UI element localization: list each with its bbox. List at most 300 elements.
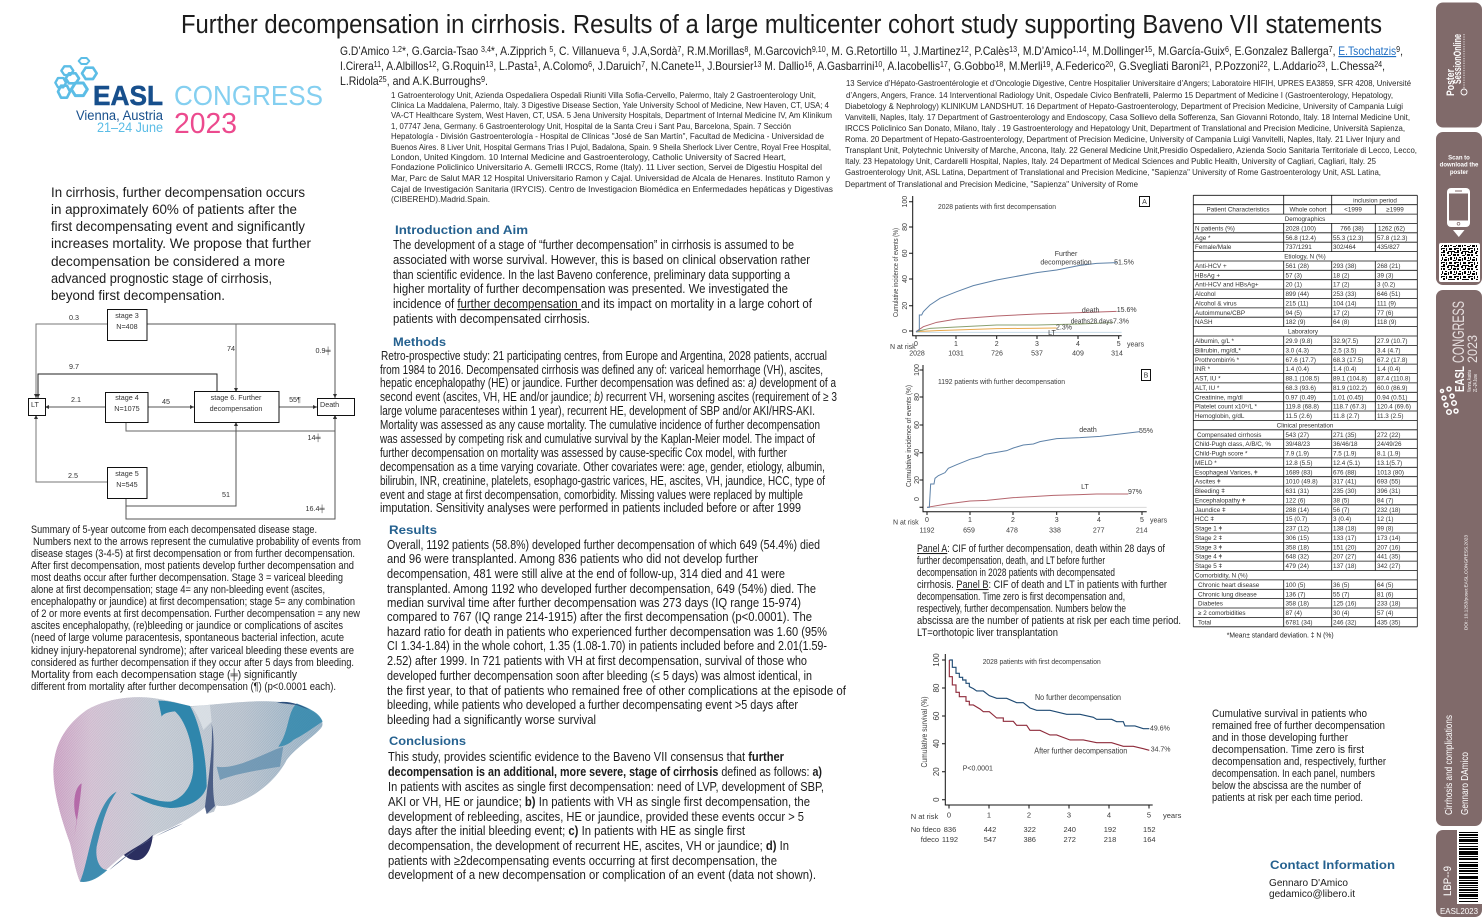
table: patient characteristics: 3.4 (4.7): [1377, 347, 1400, 354]
text: conclusions: development of rebleeding, ascites, HE or jaundice, provided these events occur > 5: [388, 809, 804, 824]
diagram labels: stage 5: [115, 469, 139, 478]
key message text: [51, 185, 311, 304]
table: patient characteristics: HBsAg +: [1195, 272, 1220, 279]
text: results: decompensation, 481 were still alive at the end of follow-up, 314 died and 41 were: [387, 566, 785, 581]
chart B labels: years: [1150, 518, 1168, 524]
chart B labels: 80: [914, 393, 921, 401]
chart A labels: N at risk: [890, 344, 916, 351]
diagram summary text: Mortality from each decompensation stage (╪) significantly: [31, 668, 298, 682]
table: patient characteristics: 55 (7): [1333, 591, 1349, 598]
chart A labels: years: [1127, 342, 1145, 348]
logo: EASL Congress 2023: 21–24 June: [97, 120, 163, 135]
table: patient characteristics: Diabetes: [1198, 601, 1223, 608]
table: patient characteristics: Whole cohort: [1289, 207, 1327, 214]
table: patient characteristics: 11.5 (2.6): [1286, 413, 1312, 420]
chart C labels: 192: [1104, 825, 1116, 834]
table: patient characteristics: ALT, IU *: [1195, 385, 1220, 392]
chart B labels: [893, 364, 1168, 534]
table: patient characteristics: 29.9 (9.8): [1286, 338, 1312, 345]
table: patient characteristics: 118.7 (67.3): [1333, 404, 1366, 411]
diagram summary text: ascites encephalopathy, (re)bleeding or jaundice or complications of ascites: [31, 620, 343, 632]
table: patient characteristics: 67.2 (17.8): [1377, 357, 1407, 364]
sidebar: poster session online: Poster: [1445, 68, 1457, 96]
chart C labels: [911, 653, 1182, 844]
chart A labels: 15.6%: [1117, 307, 1137, 314]
text: introduction: The development of a stage of “further decompensation” in cirrhosis is assumed to be: [393, 237, 794, 252]
logo: EASL Congress 2023: 2023: [174, 108, 237, 140]
diagram summary text: [31, 524, 361, 693]
table: patient characteristics: 120.4 (69.6): [1377, 404, 1411, 411]
table: patient characteristics: Chronic lung disease: [1198, 591, 1257, 598]
affiliations left: [391, 90, 833, 204]
table: patient characteristics: Female/Male: [1195, 244, 1232, 251]
text: results: the first year, to that of patients who remained free of other complications at the episode of: [387, 683, 846, 698]
caption: survival chart: remained free of further decompensation: [1212, 720, 1385, 732]
chart A labels: 3: [1035, 341, 1039, 348]
diagram labels: N=1075: [114, 404, 140, 413]
text: methods: decompensation as a time varying covariate. Other covariates were: age, gender, etiology, albumin,: [380, 459, 825, 474]
logo: EASL Congress 2023: Vienna, Austria: [76, 108, 163, 123]
sidebar: congress and session info: Vienna, Austria: [1467, 370, 1473, 392]
text: conclusions: decompensation is an additional, more severe, stage of cirrhosis defined as follows: a): [388, 764, 822, 779]
table: patient characteristics: 57.8 (12.3): [1377, 235, 1407, 242]
affiliations right: d’Angers, Angers, France. 14 Interventional Radiology Unit, Ospedale Civico Benfratelli, Palermo 15 Department of Medicine I (Gastroenterology, Hepatology,: [846, 90, 1393, 100]
diagram labels: 0.9╪: [315, 346, 331, 356]
sidebar: scan to download: download the: [1440, 162, 1479, 168]
diagram labels: 14╪: [307, 433, 321, 443]
table: patient characteristics: 12 (1): [1377, 516, 1393, 523]
caption: panels A and B: respectively, further decompensation. Numbers below the: [917, 603, 1126, 615]
chart A labels: LT: [1048, 330, 1057, 337]
table: patient characteristics: 67.6 (17.7): [1286, 357, 1316, 364]
table: patient characteristics: 56 (7): [1333, 507, 1349, 514]
affiliations left: (CIBEREHD).Madrid.Spain.: [391, 194, 490, 204]
table: patient characteristics: 1010 (49.8): [1286, 479, 1318, 486]
table: patient characteristics: 111 (9): [1377, 300, 1396, 308]
table: patient characteristics: 358 (18): [1286, 601, 1309, 608]
table: patient characteristics: INR *: [1195, 366, 1211, 373]
chart C labels: 3: [1067, 810, 1071, 820]
table: patient characteristics: 1.4 (0.4): [1377, 366, 1400, 373]
table: patient characteristics: <1999: [1344, 207, 1362, 214]
caption: panels A and B: abscissa are the number of patients at risk per each time period.: [917, 615, 1181, 627]
table: patient characteristics: 77 (6): [1377, 310, 1393, 317]
diagram labels: 74: [227, 344, 235, 353]
chart B labels: 2: [1011, 517, 1015, 524]
table footnote: *Mean± standard deviation. ‡ N (%): [1227, 632, 1334, 640]
chart B labels: 1: [968, 517, 972, 524]
chart B labels: Cumulative incidence of events (%): [906, 385, 913, 487]
logo: EASL Congress 2023: EASL: [93, 80, 163, 111]
text: methods: was assessed by competing risk and cumulative survival by the Kaplan-Meier model. The impact of: [379, 431, 815, 446]
affiliations left: 1 Gatroenterology Unit, Azienda Ospedaliera Ospedali Riuniti Villa Sofia-Cervello, Palermo, Italy 2 Gastroenterology Unit,: [391, 90, 816, 100]
contact information: [1269, 860, 1395, 900]
chart B labels: 1192 patients with further decompensation: [938, 379, 1065, 386]
table: patient characteristics: 27.9 (10.7): [1377, 338, 1407, 345]
table: patient characteristics: Bleeding ǂ: [1195, 488, 1225, 495]
diagram labels: stage 4: [115, 393, 139, 402]
table: patient characteristics: 94 (5): [1286, 310, 1302, 317]
chart B labels: 55%: [1139, 428, 1153, 435]
table: patient characteristics: 36 (5): [1333, 582, 1349, 589]
chart A labels: 80: [902, 223, 909, 231]
chart A labels: 40: [902, 275, 909, 283]
table: patient characteristics: 38 (5): [1333, 498, 1349, 504]
table: patient characteristics: 32.9(7.5): [1333, 338, 1358, 345]
table: patient characteristics: 232 (18): [1377, 507, 1400, 514]
affiliations right: [845, 78, 1417, 189]
table: patient characteristics: 233 (18): [1377, 601, 1400, 608]
sidebar: scan to download: [1436, 132, 1482, 285]
table: patient characteristics: 173 (14): [1377, 535, 1400, 542]
affiliations left: 1, 07747 Jena, Germany. 6 Gastroenterology Unit, Hospital de la Santa Creu i Sant Pau, Barcelona, Spain. 7 Sección: [391, 121, 791, 131]
chart A labels: 7.3%: [1113, 318, 1129, 326]
chart C labels: 34.7%: [1151, 746, 1171, 754]
chart A labels: 2.3%: [1056, 324, 1072, 332]
table: patient characteristics: ≥1999: [1386, 207, 1404, 214]
table: patient characteristics: ≥ 2 comorbidities: [1198, 610, 1246, 617]
table: patient characteristics: 272 (22): [1377, 432, 1400, 439]
text: conclusions: This study, provides scientific evidence to the Baveno VII consensus that further: [388, 749, 784, 764]
icon: EASL hexagons: [1440, 387, 1458, 414]
table: patient characteristics: Creatinine, mg/dl: [1195, 394, 1243, 401]
chart C labels: fdeco: [921, 835, 939, 844]
chart B labels: LT: [1081, 484, 1090, 491]
table: patient characteristics: Esophageal Varices, ǂ: [1195, 469, 1258, 476]
table: patient characteristics: 55.3 (12.3): [1333, 235, 1363, 242]
panel tag A: A: [1142, 199, 1147, 206]
chart B labels: 1192: [919, 528, 935, 534]
table: patient characteristics: 1.4 (0.4): [1286, 366, 1309, 373]
affiliations left: Mar, Parc de Salut MAR 12 Hospital Universitario Ramon y Cajal. Universidad de Alcala de Henares. Instituto Ramon y: [391, 173, 831, 183]
text: conclusions: development of a new decompensation or complication of an event (data not shown).: [388, 867, 816, 882]
chart A labels: 4: [1076, 341, 1080, 348]
table: patient characteristics: 125 (16): [1333, 601, 1356, 608]
icon: arrow down: [1453, 230, 1464, 237]
chart B labels: 478: [1006, 528, 1018, 534]
table: patient characteristics: 7.9 (1.9): [1286, 451, 1309, 458]
chart C labels: 1: [987, 810, 991, 820]
chart C labels: After further decompensation: [1034, 746, 1127, 756]
table: patient characteristics: 12.4 (5.1): [1333, 460, 1360, 467]
chart C labels: 0: [947, 810, 951, 820]
affiliations left: VA-CT Healthcare System, West Haven, CT, USA. 5 Jena University Hospitals, Department of Internal Medicine IV, Am Klinikum: [391, 110, 832, 120]
diagram summary text: of 2 or more events at first decompensation. Further decompensation = any new: [31, 608, 360, 620]
diagram labels: decompensation: [210, 404, 262, 413]
authors: I.Cirera11, A.Albillos12, G.Roquin13, L.Pasta1, A.Colomo6, J.Daruich7, N.Canete11, J.Boursier13 M. Dallio16, A.Gasbarrini10, A.Iacobellis17, G.Gobbo18, M.Merli19, A.Federico20, G.Svegliati Baroni21, P.Pozzoni22, L.Addario23, L.Chessa24,: [340, 60, 1385, 73]
table: patient characteristics: 133 (17): [1333, 535, 1356, 542]
text: methods: bilirubin, INR, creatinine, platelets, esophago-gastric varices, HE, ascites, VH, jaundice, HCC, type of: [380, 473, 825, 488]
affiliations left: Fondazione Policlinico Universitario A. Gemelli IRCCS, Rome (Italy). 11 Liver section, Servei de Digestiu Hospital del: [391, 162, 822, 172]
chart C labels: N at risk: [911, 812, 938, 821]
authors: L.Ridola25, and A.K.Burroughs9.: [340, 74, 488, 88]
chart C labels: 60: [932, 711, 941, 720]
table: patient characteristics: inclusion period: [1353, 197, 1397, 204]
diagram summary text: most deaths occur after further decompensation. Stage 3 = variceal bleeding: [31, 572, 343, 584]
caption: panels A and B: [917, 543, 1181, 639]
chart B labels: death: [1079, 427, 1097, 434]
affiliations right: Vanvitelli, Naples, Italy. 17 Department of Gastroenterology and Endoscopy, Casa Sollievo della Sofferenza, San Giovanni Rotondo, Italy. 18 Internal Medicine Unit,: [845, 112, 1410, 122]
chart C labels: years: [1163, 811, 1182, 820]
table: patient characteristics: 342 (27): [1377, 563, 1400, 570]
caption: panels A and B: LT=orthotopic liver transplantation: [917, 627, 1058, 639]
diagram labels: 2.1: [71, 395, 81, 404]
sidebar: congress and session info: 2023: [1464, 335, 1480, 363]
table: patient characteristics: 268 (21): [1377, 263, 1400, 270]
table: patient characteristics: 122 (6): [1286, 498, 1305, 504]
table: patient characteristics: 100 (5): [1286, 582, 1305, 589]
table: patient characteristics: 87 (4): [1286, 610, 1302, 617]
table: patient characteristics: 138 (18): [1333, 526, 1356, 533]
chart C labels: 1192: [942, 835, 958, 844]
table: patient characteristics: 435 (35): [1377, 619, 1400, 626]
table: patient characteristics: 561 (28): [1286, 263, 1309, 270]
table: patient characteristics: 57 (4): [1377, 610, 1393, 617]
diagram labels: 2.5: [68, 471, 78, 480]
diagram labels: 0.3: [69, 313, 79, 322]
chart C labels: No further decompensation: [1035, 693, 1121, 702]
table: patient characteristics: Anti-HCV +: [1195, 263, 1227, 270]
text: results: and 96 were transplanted. Among 836 patients who did not develop further: [387, 551, 759, 566]
chart C labels: 152: [1143, 825, 1156, 834]
caption: panels A and B: decompensation in 2028 patients with decompensated: [917, 567, 1115, 579]
sidebar: congress and session info: CONGRESS: [1450, 301, 1468, 363]
table: patient characteristics: 89.1 (104.8): [1333, 376, 1367, 382]
table: patient characteristics: 207 (27): [1333, 554, 1356, 561]
table: patient characteristics: 36/46/18: [1333, 441, 1358, 448]
text: results: CI 1.34-1.84) in the whole cohort, 1.35 (1.08-1.70) in patients included before and 2.01(1.59-: [387, 638, 827, 653]
table: patient characteristics: 118 (9): [1377, 319, 1396, 326]
chart B labels: 97%: [1128, 489, 1142, 496]
contact information: gedamico@libero.it: [1269, 889, 1355, 900]
chart A labels: 60: [902, 249, 909, 257]
table: patient characteristics: 151 (20): [1333, 544, 1356, 551]
chart C labels: 272: [1063, 835, 1076, 844]
sidebar: congress and session info: Cirrhosis and complications: [1443, 715, 1455, 815]
table: patient characteristics: 20 (1): [1286, 282, 1302, 289]
table: patient characteristics: 358 (18): [1286, 544, 1309, 551]
table: patient characteristics: 737/1291: [1286, 244, 1312, 251]
table: patient characteristics: 1.01 (0.45): [1333, 394, 1363, 401]
table: patient characteristics: 1262 (62): [1378, 225, 1405, 232]
chart B labels: 0: [925, 517, 929, 524]
sidebar: congress and session info: Gennaro DAmico: [1459, 752, 1471, 815]
contact information: Contact Information: [1270, 860, 1395, 872]
table: patient characteristics: 676 (88): [1333, 469, 1356, 476]
table: patient characteristics: 88.1 (108.5): [1286, 376, 1319, 382]
heading: introduction: Introduction and Aim: [395, 225, 528, 237]
table: patient characteristics: 24/49/26: [1377, 441, 1402, 448]
table: patient characteristics: Albumin, g/L *: [1195, 338, 1235, 345]
table: patient characteristics: 17 (2): [1333, 282, 1349, 289]
chart B labels: 3: [1055, 517, 1059, 524]
text: conclusions: AKI or VH, HE or jaundice; b) In patients with VH as single first decompensation, the: [388, 794, 810, 809]
sidebar: poster number and barcode: [1436, 830, 1482, 917]
text: results: developed further decompensation soon after bleeding (≤ 5 days) was almost identical, in: [387, 668, 812, 683]
sidebar: poster session online: [1436, 2, 1482, 128]
diagram summary text: After first decompensation, most patients develop further decompensation and: [31, 560, 354, 572]
chart C labels: 322: [1023, 825, 1036, 834]
table: patient characteristics: 57 (3): [1286, 272, 1302, 279]
panel tag A: [1140, 196, 1150, 206]
text: introduction: patients with decompensated cirrhosis.: [393, 311, 590, 326]
affiliations left: Buenos Aires. 8 Liver Unit, Hospital Germans Trias I Pujol, Badalona, Spain. 9 Sheila Sherlock Liver Centre, Royal Free Hospital,: [391, 142, 831, 152]
table: patient characteristics: 479 (24): [1286, 563, 1309, 570]
table: patient characteristics: Demographics: [1285, 216, 1325, 223]
chart C labels: 547: [984, 835, 996, 844]
caption: survival chart: [1212, 708, 1386, 804]
table: patient characteristics: Stage 2 ǂ: [1195, 535, 1222, 542]
table: patient characteristics: 2.5 (3.5): [1333, 347, 1356, 354]
table: patient characteristics: 207 (16): [1377, 544, 1400, 551]
diagram labels: stage 3: [115, 311, 139, 320]
sidebar: congress and session info: EASL: [1452, 366, 1467, 392]
chart C labels: 80: [932, 683, 941, 692]
table: patient characteristics: AST, IU *: [1195, 376, 1221, 382]
table: patient characteristics: Alcohol: [1195, 291, 1216, 298]
authors: [340, 44, 1403, 88]
contact information: Gennaro D'Amico: [1269, 878, 1348, 889]
chart A labels: 537: [1031, 350, 1043, 358]
chart A labels: 726: [991, 350, 1003, 358]
diagram labels: stage 6. Further: [211, 393, 262, 402]
chart B labels: 0: [914, 497, 921, 501]
chart B labels: 5: [1140, 517, 1144, 524]
text: methods: Mortality was assessed as any cause mortality. The cumulative incidence of further decompensation: [380, 417, 820, 432]
text: conclusions: patients with ≥2decompensating events occurring at first decompensation, the: [388, 853, 777, 868]
chart B labels: 277: [1093, 528, 1105, 534]
sidebar: poster session online: SessionOnline: [1452, 34, 1464, 84]
caption: panels A and B: Panel A: CIF of further decompensation, death within 28 days of: [917, 543, 1165, 555]
text: introduction: incidence of further decompensation and its impact on mortality in a large cohort of: [393, 296, 812, 311]
text: introduction: [393, 237, 812, 326]
table: patient characteristics: 60.0 (86.9): [1377, 385, 1407, 392]
table: patient characteristics: Hemoglobin, g/dL: [1195, 413, 1245, 420]
table: patient characteristics: Clinical presentation: [1277, 422, 1334, 429]
diagram labels: 45: [162, 397, 170, 406]
table: patient characteristics: 104 (14): [1333, 300, 1356, 308]
sidebar: congress and session info: [1436, 290, 1482, 826]
table: patient characteristics: 0.94 (0.51): [1377, 394, 1407, 401]
table: patient characteristics: Anti-HCV and HBsAg+: [1195, 282, 1259, 289]
table: patient characteristics: Child-Pugh score *: [1195, 451, 1248, 458]
table: patient characteristics: 899 (44): [1286, 291, 1309, 298]
text: methods: imputation. Sensitivity analyses were performed in patients included before or after 1999: [380, 500, 801, 515]
diagram labels: N=408: [116, 322, 138, 331]
table: patient characteristics: 1.4 (0.4): [1333, 366, 1356, 373]
table: patient characteristics: 17 (2): [1333, 310, 1349, 317]
table: patient characteristics: 30 (4): [1333, 610, 1349, 617]
diagram summary text: different from mortality after further decompensation (¶) (p<0.0001 each).: [31, 681, 336, 693]
caption: survival chart: Cumulative survival in patients who: [1212, 708, 1367, 720]
chart B labels: 214: [1136, 528, 1148, 534]
affiliations right: Transplant Unit, Polytechnic University of Marche, Ancona, Italy. 22 General Medicine Unit,Presidio Ospedaliero, Azienda Socio Sanitaria Territoriale di Lecco, Lecco,: [845, 145, 1417, 155]
table: patient characteristics: 2028 (100): [1286, 225, 1316, 232]
table: patient characteristics: 766 (38): [1340, 225, 1364, 232]
table: patient characteristics: Bilirubin, mg/dL*: [1195, 347, 1241, 354]
flow diagram: [28, 310, 354, 519]
table: patient characteristics: Stage 1 ǂ: [1195, 526, 1222, 533]
table: patient characteristics: Comorbidity, N (%): [1195, 572, 1248, 580]
chart C labels: 40: [932, 739, 941, 748]
text: methods: large volume paracenteses within 1 year), recurrent HE, development of SBP and/or AKI/HRS-AKI.: [380, 403, 815, 418]
table: patient characteristics: Platelet count x10⁹/L *: [1195, 404, 1258, 411]
title: Further decompensation in cirrhosis. Results of a large multicenter cohort study supporting Baveno VII statements: [181, 11, 1382, 39]
table: patient characteristics: Age *: [1195, 235, 1211, 242]
authors: G.D’Amico 1,2*, G.Garcia-Tsao 3,4*, A.Zipprich 5, C. Villanueva 6, J.A,Sordà7, R.M.Morillas8, M.Garcovich9,10, M. G.Retortillo 11, J.Martinez12, P.Calès13, M.D’Amico1,14, M.Dollinger15, M.García-Guix6, E.Gonzalez Ballerga7, E.Tsochatzis9,: [340, 44, 1403, 58]
key message text: In cirrhosis, further decompensation occurs: [51, 185, 305, 201]
table: patient characteristics: 13.1(5.7): [1377, 460, 1402, 467]
text: conclusions: In patients with ascites as single first decompensation: need of LVP, development of SBP,: [388, 779, 824, 794]
text: results: hazard ratio for death in patients who experienced further decompensation was 1.60 (95%: [387, 624, 827, 639]
diagram labels: [31, 311, 339, 514]
chart C labels: 164: [1143, 835, 1156, 844]
table: patient characteristics: 6781 (34): [1286, 619, 1312, 626]
affiliations left: Clinica La Maddalena, Palermo, Italy. 3 Digestive Disease Section, Yale University School of Medicine, New Haven, CT, USA; 4: [391, 100, 829, 110]
chart A labels: 2028 patients with first decompensation: [938, 204, 1056, 211]
affiliations right: 13 Service d’Hépato-Gastroentérologie et d’Oncologie Digestive, Centre Hospitalier Universitaire d’Angers; Laboratoire HIFIH, UPRES EA3859, SFR 4208, Université: [846, 78, 1411, 88]
chart C labels: 442: [984, 825, 996, 834]
table: patient characteristics: 648 (32): [1286, 554, 1309, 561]
table: patient characteristics: Jaundice ǂ: [1195, 507, 1226, 514]
table: patient characteristics: 119.8 (68.8): [1286, 404, 1319, 411]
chart C labels: Cumulative survival (%): [920, 696, 929, 768]
table: patient characteristics: 3 (0.4): [1333, 516, 1351, 523]
table: patient characteristics: Ascites ǂ: [1195, 479, 1221, 486]
QR code: [1439, 243, 1480, 282]
table: patient characteristics: Prothrombin% *: [1195, 357, 1240, 364]
table: patient characteristics: 306 (15): [1286, 535, 1309, 542]
diagram labels: 9.7: [69, 362, 79, 371]
table: patient characteristics: 253 (33): [1333, 291, 1356, 298]
chart C: cumulative survival: [911, 653, 1182, 844]
caption: survival chart: decompensation. Time zero is first: [1212, 744, 1364, 756]
table: patient characteristics: Stage 5 ǂ: [1195, 563, 1222, 570]
chart C labels: 0: [932, 797, 941, 802]
table: patient characteristics: 441 (35): [1377, 554, 1400, 561]
diagram labels: N=545: [116, 480, 138, 489]
diagram summary text: alone at first decompensation; stage 4= any non-bleeding event (ascites,: [31, 584, 325, 596]
chart A labels: 409: [1072, 350, 1084, 358]
table: patient characteristics: 693 (55): [1377, 479, 1400, 486]
logo: EASL Congress 2023: CONGRESS: [174, 80, 323, 111]
table: patient characteristics: 11.8 (2.7): [1333, 413, 1360, 420]
table: patient characteristics: 3 (0.2): [1377, 282, 1395, 289]
panel tag B: [1142, 370, 1150, 380]
key message text: in approximately 60% of patients after the: [51, 202, 297, 218]
table: patient characteristics: 182 (9): [1286, 319, 1305, 326]
text: results: compared to 767 (IQ range 214-1915) after the first decompensation (p<0.0001). The: [387, 609, 812, 624]
table: patient characteristics: 81 (6): [1377, 591, 1393, 598]
table: patient characteristics: 15 (0.7): [1286, 516, 1307, 523]
table: patient characteristics: Alcohol & virus: [1195, 300, 1237, 308]
diagram summary text: encephalopathy or jaundice) at first decompensation; stage 5= any combination: [31, 596, 355, 608]
affiliations left: Cajal de Investigación Sanitaria (IRYCIS). Centro de Investigacion Biomédica en Enfermedades hepáticas y Digestivas: [391, 184, 833, 194]
text: results: Overall, 1192 patients (58.8%) developed further decompensation of which 649 (54.4%) died: [387, 537, 820, 552]
table: patient characteristics: 646 (51): [1377, 291, 1400, 298]
chart C labels: 49.6%: [1150, 726, 1170, 732]
caption: survival chart: decompensation. In each panel, numbers: [1212, 768, 1375, 780]
chart A labels: 0: [902, 329, 909, 333]
table: patient characteristics: 99 (8): [1377, 526, 1393, 533]
chart B labels: 20: [914, 476, 921, 484]
chart A: cumulative incidence: [890, 196, 1150, 358]
text: methods: hepatic encephalopathy (HE) or jaundice. Further decompensation was defined as: a) development of a: [380, 375, 837, 390]
caption: survival chart: and in those developing further: [1212, 732, 1348, 744]
chart A labels: 5: [1117, 341, 1121, 348]
key message text: advanced prognostic stage of cirrhosis,: [51, 271, 272, 287]
table: patient characteristics: 8.1 (1.9): [1377, 451, 1400, 458]
